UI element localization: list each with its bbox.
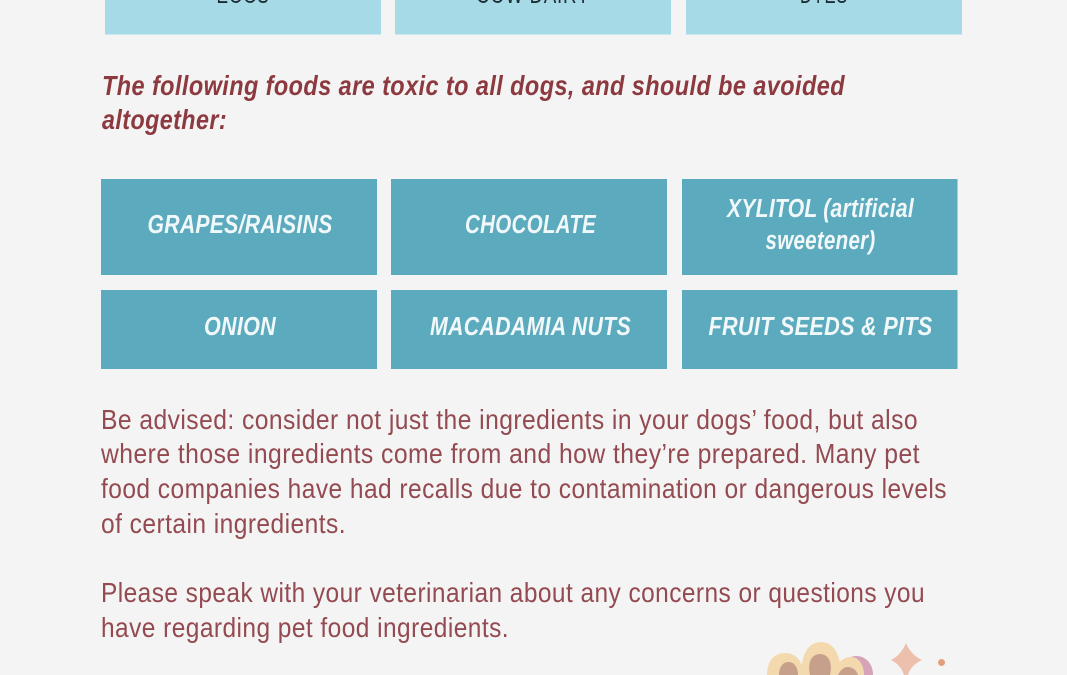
heading: toxic foods warning (102, 70, 846, 135)
text block: veterinarian advice (101, 577, 925, 643)
panel: toxic foods grid (101, 179, 958, 369)
icon: paw and sparkles (767, 642, 945, 675)
box: chocolate: CHOCOLATE (465, 211, 597, 239)
text block: be advised paragraph: where those ingredients come from and how they’re prepared. Many pet (100, 438, 920, 469)
text block: be advised paragraph: Be advised: consider not just the ingredients in your dogs’ food, but also (101, 404, 918, 435)
text block: be advised paragraph (100, 404, 947, 539)
box: xylitol: XYLITOL (artificial (725, 195, 915, 223)
box: onion: ONION (204, 313, 276, 341)
box: macadamia nuts (391, 290, 667, 369)
panel: cropped top row of light blue boxes (105, 0, 962, 34)
heading: toxic foods warning: The following foods are toxic to all dogs, and should be avoided (102, 70, 846, 101)
text block: veterinarian advice: Please speak with your veterinarian about any concerns or questions you (101, 577, 925, 608)
box: fruit seeds and pits: FRUIT SEEDS & PITS (708, 313, 932, 341)
heading: toxic foods warning: altogether: (102, 104, 227, 135)
box: macadamia nuts: MACADAMIA NUTS (430, 313, 631, 341)
box: chocolate (391, 179, 667, 275)
box: xylitol (682, 179, 958, 275)
text block: be advised paragraph: food companies have had recalls due to contamination or dangerous levels (101, 473, 947, 504)
box: onion (101, 290, 377, 369)
box: fruit seeds and pits (682, 290, 958, 369)
text block: be advised paragraph: of certain ingredients. (101, 508, 346, 539)
box: grapes and raisins: GRAPES/RAISINS (148, 211, 332, 239)
text block: veterinarian advice: have regarding pet food ingredients. (101, 612, 509, 643)
box: grapes and raisins (101, 179, 377, 275)
box: xylitol: sweetener) (766, 227, 876, 255)
